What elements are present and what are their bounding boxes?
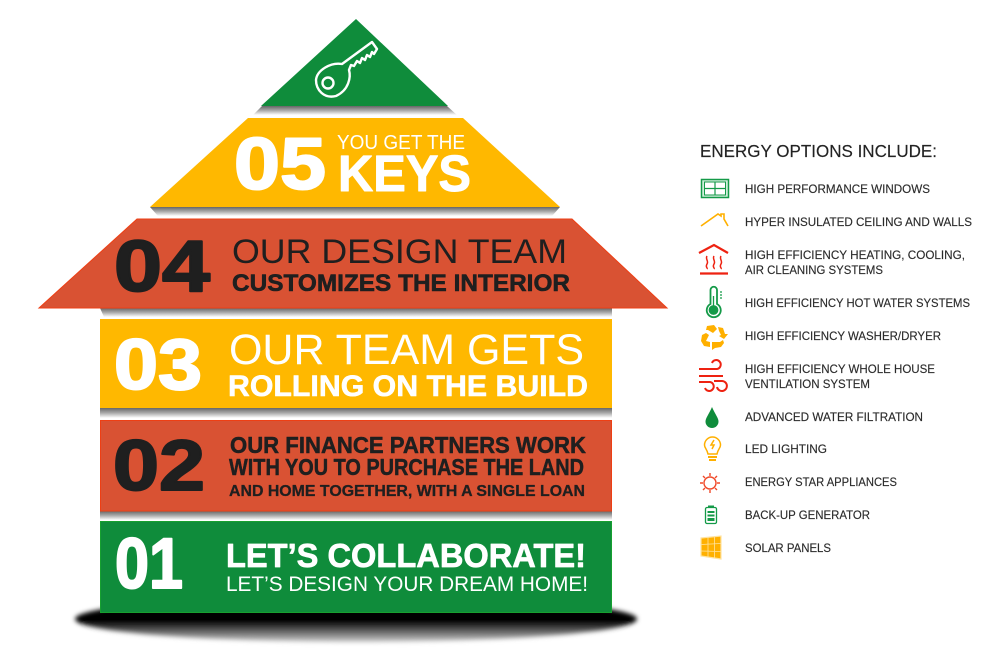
step text 02 xyxy=(229,432,586,500)
label: solar panels: SOLAR PANELS xyxy=(745,541,831,555)
label: heating and cooling: HIGH EFFICIENCY HEATING, COOLING, xyxy=(745,248,965,262)
ground shadow xyxy=(75,596,637,642)
label: hot water: HIGH EFFICIENCY HOT WATER SYSTEMS xyxy=(745,296,970,310)
step text 04: OUR DESIGN TEAM xyxy=(232,233,567,271)
icon: thermometer xyxy=(707,287,722,317)
icon: roof xyxy=(701,214,728,226)
step text 01 xyxy=(226,537,588,596)
step text 05: YOU GET THE xyxy=(337,132,465,154)
icon: light bulb xyxy=(704,437,720,460)
step text 01: LET’S DESIGN YOUR DREAM HOME! xyxy=(226,573,588,596)
step number 04: 04 xyxy=(114,227,210,307)
icon: solar panel xyxy=(701,536,721,559)
label: windows: HIGH PERFORMANCE WINDOWS xyxy=(745,182,930,196)
step text 04: CUSTOMIZES THE INTERIOR xyxy=(232,270,570,297)
label: heating and cooling xyxy=(745,248,965,277)
house tier: step 03 xyxy=(100,319,612,418)
house tier: step 04 xyxy=(39,219,667,317)
house tier: step 01 xyxy=(100,522,612,612)
label: heating and cooling: AIR CLEANING SYSTEMS xyxy=(745,263,883,277)
step number 03: 03 xyxy=(114,326,202,405)
house tier: roof key xyxy=(253,19,457,115)
label: LED lighting: LED LIGHTING xyxy=(745,442,827,456)
step text 05: KEYS xyxy=(338,145,471,202)
icon: key xyxy=(316,42,377,97)
legend xyxy=(699,141,972,559)
label: water filtration: ADVANCED WATER FILTRATION xyxy=(745,410,923,424)
step text 01: LET’S COLLABORATE! xyxy=(226,537,586,574)
label: ventilation: HIGH EFFICIENCY WHOLE HOUSE xyxy=(745,362,935,376)
icon: recycle xyxy=(701,325,728,350)
step text 03 xyxy=(228,326,588,403)
label: washer dryer: HIGH EFFICIENCY WASHER/DRYER xyxy=(745,329,941,343)
icon: battery xyxy=(706,506,716,524)
step text 03: OUR TEAM GETS xyxy=(229,326,584,374)
label: ceiling and walls: HYPER INSULATED CEILING AND WALLS xyxy=(745,215,972,229)
label: ventilation xyxy=(745,362,935,391)
step number 05: 05 xyxy=(234,124,326,205)
step number 01: 01 xyxy=(115,525,183,604)
icon: window xyxy=(702,180,728,198)
legend heading: ENERGY OPTIONS INCLUDE: xyxy=(700,141,937,161)
step text 02: WITH YOU TO PURCHASE THE LAND xyxy=(229,454,584,480)
icon: wind xyxy=(699,360,727,391)
icon: sun xyxy=(700,473,720,493)
icon: water drop xyxy=(706,407,718,428)
icon: heated house xyxy=(699,245,728,274)
label: appliances: ENERGY STAR APPLIANCES xyxy=(745,475,897,489)
step text 02: OUR FINANCE PARTNERS WORK xyxy=(230,432,586,458)
step text 02: AND HOME TOGETHER, WITH A SINGLE LOAN xyxy=(229,483,585,500)
label: generator: BACK-UP GENERATOR xyxy=(745,508,870,522)
house tier: step 02 xyxy=(100,420,612,520)
house tier: step 05 xyxy=(150,118,560,216)
step number 02: 02 xyxy=(113,427,205,506)
step text 04 xyxy=(232,233,570,297)
step text 03: ROLLING ON THE BUILD xyxy=(228,370,588,403)
label: ventilation: VENTILATION SYSTEM xyxy=(745,377,870,391)
